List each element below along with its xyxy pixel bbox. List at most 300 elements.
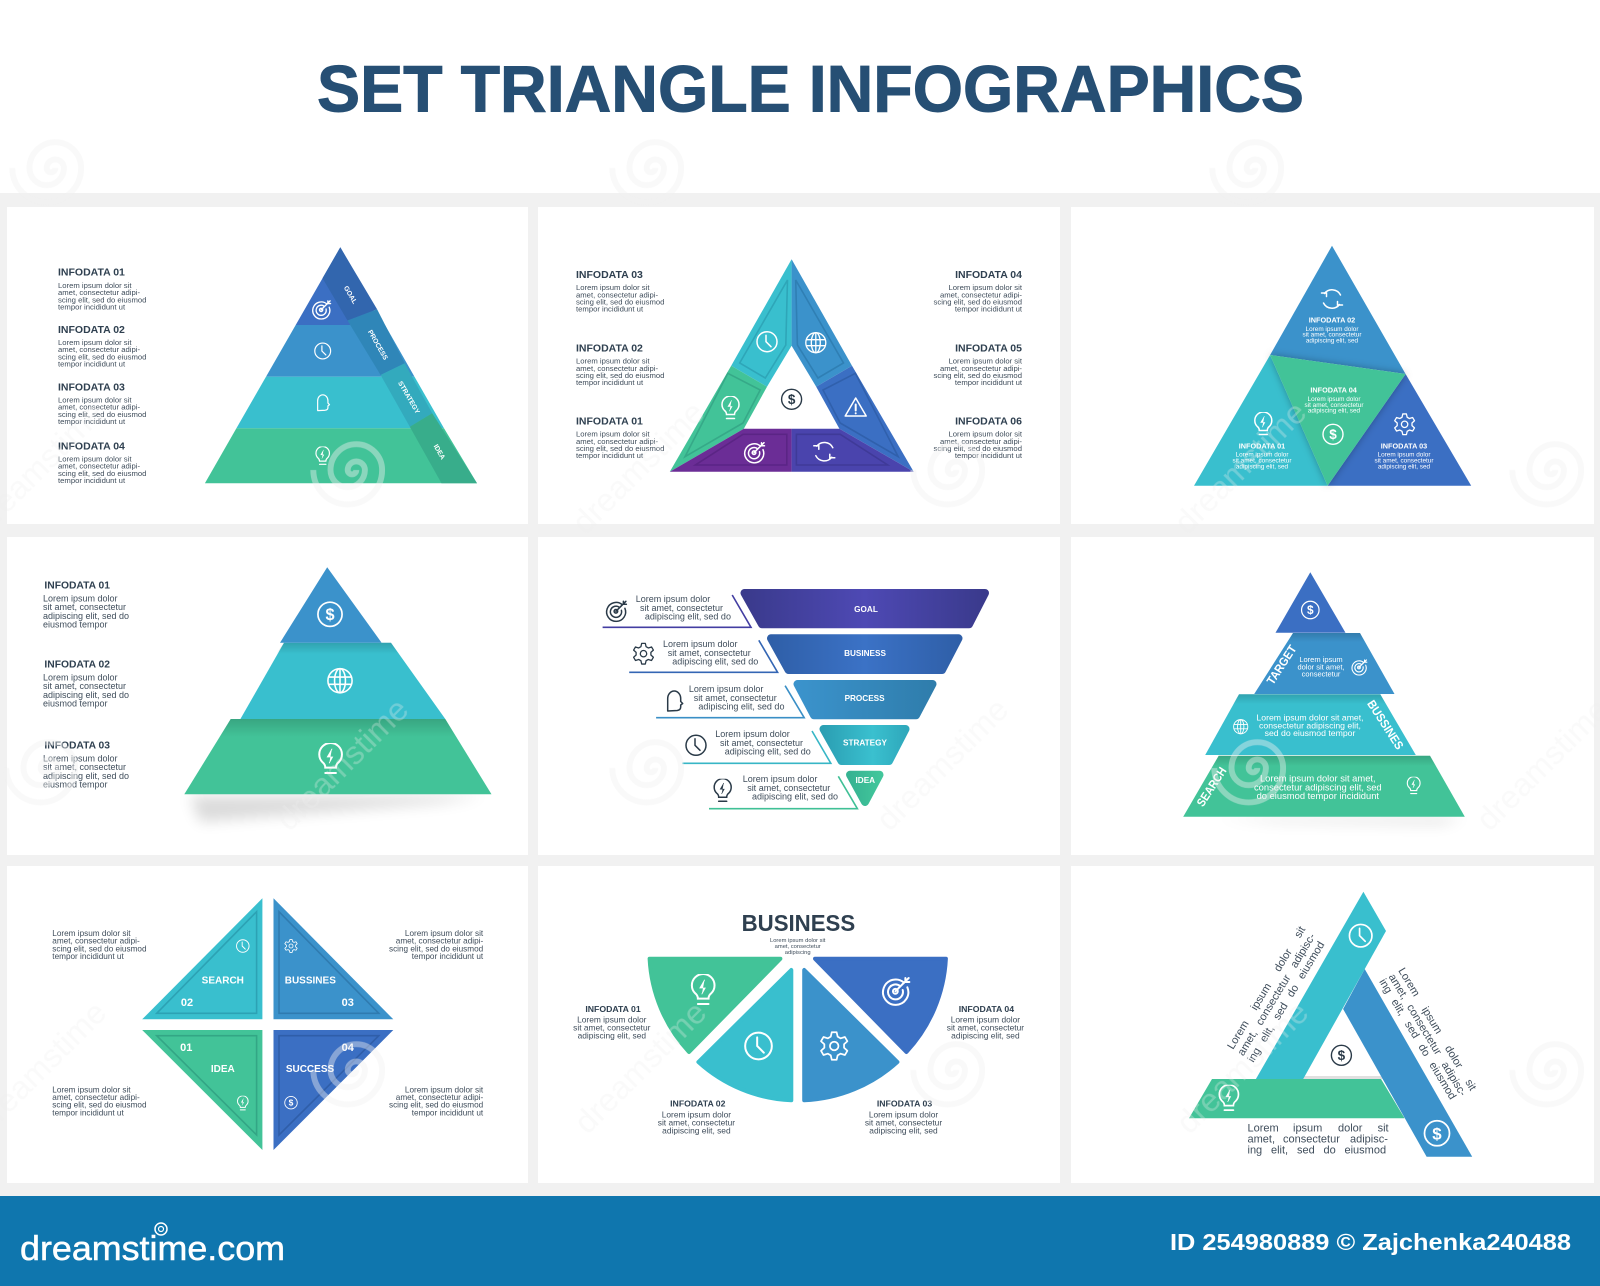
text block: infodata 01 <box>58 267 146 311</box>
text block: infodata 03: adipiscing elit, sed do <box>43 771 129 781</box>
text: infodata 01: INFODATA 01 <box>1239 441 1285 450</box>
text block: infodata 02: INFODATA 02 <box>670 1098 726 1108</box>
text: infodata 04: sit amet, consectetur <box>1305 402 1364 409</box>
triangle: right royal <box>1328 374 1471 486</box>
text: infodata 04: adipiscing elit, sed <box>1308 408 1361 415</box>
text block: infodata 04 <box>947 1004 1024 1041</box>
text block: infodata 01 <box>573 1004 651 1041</box>
wedge: blue <box>804 970 897 1100</box>
panel: business semicircle <box>538 866 1060 1183</box>
footer bar <box>0 1196 1600 1286</box>
text: left rotated: ipsum <box>1249 981 1274 1013</box>
text: right rotated: eiusmod <box>1426 1060 1458 1102</box>
text block: infodata 02: Lorem ipsum dolor sit <box>58 338 132 347</box>
label: IDEA: IDEA <box>211 1064 235 1075</box>
text block: infodata 02: tempor incididunt ut <box>58 359 126 368</box>
text: infodata 03: Lorem ipsum dolor <box>1378 452 1431 459</box>
ground shadow <box>1215 818 1465 824</box>
text: bottom right: Lorem ipsum dolor sit <box>405 1085 484 1094</box>
segment: teal <box>731 259 792 387</box>
text block: infodata 01: scing elit, sed do eiusmod <box>58 295 146 304</box>
text block: infodata 02: eiusmod tempor <box>43 699 108 709</box>
funnel: process <box>798 684 932 715</box>
text: bottom: adipisc- <box>1350 1134 1388 1146</box>
text: infodata 03: adipiscing elit, sed <box>1378 463 1431 470</box>
text block: infodata 03: eiusmod tempor <box>43 780 108 790</box>
text: right rotated: ipsum <box>1419 1005 1444 1036</box>
text block: infodata 04: tempor incididunt ut <box>58 476 126 485</box>
text block: infodata 03: sit amet, consectetur <box>43 762 126 772</box>
label: SEARCH: SEARCH <box>202 976 244 987</box>
text block: infodata 03: Lorem ipsum dolor sit <box>576 283 650 292</box>
leader: strategy <box>682 731 831 763</box>
text block: infodata 02 <box>576 343 664 387</box>
icon: head <box>318 395 330 411</box>
text block: infodata 04: INFODATA 04 <box>58 441 125 453</box>
text block: infodata 01: Lorem ipsum dolor sit <box>576 430 650 439</box>
text block: infodata 02 <box>658 1098 735 1136</box>
text: infodata 02: adipiscing elit, sed <box>1306 337 1359 344</box>
text: bottom left: tempor incididunt ut <box>52 1108 124 1117</box>
band: green <box>1189 1079 1405 1118</box>
text block: infodata 03: tempor incididunt ut <box>576 304 644 314</box>
text: goal: adipiscing elit, sed do <box>645 612 731 622</box>
ground shadow <box>190 796 485 822</box>
icon: target <box>883 978 909 1005</box>
leader: idea <box>709 776 857 809</box>
text block: infodata 03: INFODATA 03 <box>576 269 643 281</box>
text: right rotated: consectetur <box>1404 1002 1444 1058</box>
text block: infodata 04: tempor incididunt ut <box>955 304 1023 314</box>
text: bottom left: scing elit, sed do eiusmod <box>52 1101 147 1110</box>
icon: globe <box>328 669 352 693</box>
side band: strategy <box>381 363 432 427</box>
text: top left: scing elit, sed do eiusmod <box>52 944 147 953</box>
text block: infodata 02 <box>43 660 129 709</box>
text: infodata 04 <box>1305 386 1364 415</box>
icon: clock <box>237 940 249 952</box>
text: idea: Lorem ipsum dolor <box>743 774 817 784</box>
side band: idea <box>410 413 477 483</box>
funnel: idea <box>850 775 880 802</box>
icon: dollar <box>318 602 342 626</box>
icon: bulb <box>1219 1085 1238 1110</box>
wedge: royal <box>815 959 946 1052</box>
text block: infodata 03: amet, consectetur adipi- <box>58 403 140 412</box>
text: dreamstime <box>565 394 711 540</box>
text: business: adipiscing elit, sed do <box>672 656 758 666</box>
text: right rotated: sit <box>1462 1077 1478 1093</box>
icon: center dollar <box>1331 1045 1351 1065</box>
text block: infodata 02: adipiscing elit, sed <box>662 1126 731 1136</box>
icon: warning <box>845 398 866 416</box>
text: dreamstime <box>1167 394 1313 540</box>
text block: infodata 01: adipiscing elit, sed <box>578 1031 646 1041</box>
icon: refresh <box>814 442 835 461</box>
funnel: goal <box>744 593 985 624</box>
panel: six segment triangle frame <box>538 207 1060 524</box>
text: target: consectetur <box>1302 670 1341 678</box>
text: infodata 03 <box>1375 441 1434 470</box>
label: BUSSINES: BUSSINES <box>285 976 336 987</box>
text: strategy: Lorem ipsum dolor <box>715 729 790 739</box>
text: bottom: do <box>1324 1144 1336 1156</box>
text block: infodata 01: sit amet, consectetur <box>43 602 126 612</box>
icon: bulb <box>319 743 342 773</box>
icon: dollar <box>1424 1121 1450 1146</box>
text block: infodata 03: INFODATA 03 <box>58 382 125 394</box>
text: bottom: sit <box>1378 1122 1389 1134</box>
text block: infodata 02: scing elit, sed do eiusmod <box>576 371 664 380</box>
text: search: Lorem ipsum dolor sit amet, <box>1260 772 1376 784</box>
funnel: process: PROCESS <box>845 694 885 703</box>
text block: infodata 02: INFODATA 02 <box>576 343 643 355</box>
icon: bulb <box>1407 777 1420 794</box>
text block: infodata 01: amet, consectetur adipi- <box>576 437 658 446</box>
text block: infodata 01: tempor incididunt ut <box>576 451 644 460</box>
icon: target <box>1352 660 1367 675</box>
text: target: Lorem ipsum <box>1299 655 1343 664</box>
text: left rotated: ing <box>1246 1046 1264 1065</box>
text: left rotated: amet, <box>1236 1028 1260 1058</box>
icon: globe <box>806 333 826 353</box>
text: right rotated: Lorem <box>1395 966 1422 999</box>
text: bottom: sed <box>1297 1144 1315 1156</box>
wedge: green <box>650 959 780 1052</box>
icon: dollar <box>1323 424 1343 444</box>
label: 02: 02 <box>181 997 193 1009</box>
icon: clock <box>1349 924 1372 947</box>
label: PROCESS: PROCESS <box>366 329 389 362</box>
panel: interlocked triangle <box>1071 866 1594 1183</box>
text block: infodata 01: sit amet, consectetur <box>573 1023 651 1033</box>
text block: infodata 03: Lorem ipsum dolor <box>43 754 118 764</box>
label: SEARCH: SEARCH <box>1194 765 1229 809</box>
text block: infodata 04: scing elit, sed do eiusmod <box>934 297 1022 306</box>
text block: infodata 02: amet, consectetur adipi- <box>576 364 658 373</box>
text block: infodata 01 <box>43 581 129 630</box>
text block: infodata 05: INFODATA 05 <box>955 343 1022 355</box>
text: infodata 02 <box>1303 316 1362 344</box>
text: goal: sit amet, consectetur <box>640 603 723 613</box>
footer logo: dreamstime.com <box>20 1230 285 1268</box>
text: right rotated: adipisc- <box>1439 1060 1469 1099</box>
text block: infodata 04 <box>58 441 146 485</box>
tier: blue <box>280 567 382 643</box>
text: left rotated: eiusmod <box>1296 940 1327 981</box>
quadrant: idea <box>142 1030 262 1150</box>
text block: infodata 03: Lorem ipsum dolor sit <box>58 396 132 405</box>
text block: infodata 04: adipiscing elit, sed <box>951 1031 1020 1041</box>
segment: royal <box>816 366 914 472</box>
text block: infodata 05: amet, consectetur adipi- <box>940 364 1022 373</box>
text: top left: tempor incididunt ut <box>52 952 124 961</box>
tier: blue <box>1254 633 1394 694</box>
text block: infodata 03: scing elit, sed do eiusmod <box>58 410 146 419</box>
text block: infodata 02: adipiscing elit, sed do <box>43 690 129 700</box>
text: left rotated: consectetur <box>1254 972 1294 1028</box>
text: top left: Lorem ipsum dolor sit <box>52 929 131 938</box>
icon: gear <box>1395 414 1414 435</box>
text: infodata 02: INFODATA 02 <box>1309 316 1355 325</box>
text: right rotated: do <box>1416 1042 1432 1059</box>
text block: infodata 03: INFODATA 03 <box>877 1098 932 1108</box>
icon: bulb <box>722 396 739 418</box>
label: IDEA: IDEA <box>432 443 446 461</box>
text block: infodata 03 <box>43 741 129 790</box>
funnel: idea: IDEA <box>856 776 875 785</box>
pyramid slice: strategy <box>236 377 444 428</box>
text: top right: amet, consectetur adipi- <box>396 937 483 946</box>
text: dreamstime <box>869 691 1015 837</box>
segment: indigo <box>792 429 914 472</box>
funnel: goal: GOAL <box>854 605 878 614</box>
segment: green <box>670 366 767 472</box>
text block: infodata 02: sit amet, consectetur <box>43 681 126 691</box>
panel: layered pyramid with side band <box>7 207 528 524</box>
text: infodata 01: adipiscing elit, sed <box>1236 463 1289 470</box>
text block: infodata 02: INFODATA 02 <box>44 660 110 671</box>
text block: infodata 02 <box>58 324 146 368</box>
panel: four quadrant diamond <box>7 866 528 1183</box>
label: 03: 03 <box>342 997 354 1009</box>
icon: bulb <box>714 779 731 801</box>
text block: infodata 05 <box>934 343 1023 387</box>
text: bottom right: tempor incididunt ut <box>412 1108 484 1117</box>
text: bottom right: scing elit, sed do eiusmod <box>389 1101 484 1110</box>
text: goal: Lorem ipsum dolor <box>636 594 710 604</box>
text block: infodata 06: Lorem ipsum dolor sit <box>948 430 1023 439</box>
text block: infodata 01: tempor incididunt ut <box>58 302 126 311</box>
icon: center dollar <box>782 389 802 409</box>
segment: purple <box>670 429 792 472</box>
quadrant: bussines <box>274 898 393 1019</box>
text block: infodata 04: Lorem ipsum dolor sit <box>58 455 132 464</box>
icon: refresh <box>1322 290 1342 308</box>
text: infodata 04: INFODATA 04 <box>1310 386 1358 395</box>
text: infodata 03: INFODATA 03 <box>1381 441 1427 450</box>
text: heading caption: amet, consectetur <box>775 944 821 950</box>
text: left rotated: sed <box>1271 1001 1291 1022</box>
text: bottom: ipsum <box>1293 1122 1322 1134</box>
text block: infodata 03: INFODATA 03 <box>44 741 110 752</box>
text: process: adipiscing elit, sed do <box>698 702 784 712</box>
icon: clock <box>315 343 331 359</box>
text: bottom: ing <box>1248 1144 1262 1156</box>
text: strategy: adipiscing elit, sed do <box>725 746 811 756</box>
tier: teal <box>1205 694 1416 755</box>
text block: infodata 04: Lorem ipsum dolor <box>951 1015 1020 1025</box>
text: left rotated: sit <box>1292 925 1308 940</box>
text: process: Lorem ipsum dolor <box>689 684 763 694</box>
text: infodata 02: sit amet, consectetur <box>1303 332 1362 339</box>
text block: infodata 02: Lorem ipsum dolor sit <box>576 357 650 366</box>
panel: inverted funnel <box>538 537 1060 855</box>
text: search: do eiusmod tempor incididunt <box>1257 790 1379 801</box>
text: bussines: sed do eiusmod tempor <box>1265 728 1355 738</box>
text block: infodata 01: INFODATA 01 <box>576 416 643 428</box>
funnel: business: BUSINESS <box>844 649 886 658</box>
text block: infodata 05: scing elit, sed do eiusmod <box>934 371 1022 380</box>
side band: goal <box>322 247 377 320</box>
text: top right: scing elit, sed do eiusmod <box>389 944 484 953</box>
triangle: left teal <box>1194 355 1328 486</box>
text: right rotated: elit, <box>1389 997 1408 1018</box>
text block: infodata 04: INFODATA 04 <box>959 1004 1014 1014</box>
inner shadow <box>1301 1076 1383 1079</box>
funnel: strategy <box>824 729 906 761</box>
icon: gear <box>285 940 297 952</box>
text: bottom right: amet, consectetur adipi- <box>396 1093 483 1102</box>
icon: gear <box>634 643 653 664</box>
text block: infodata 01: scing elit, sed do eiusmod <box>576 444 664 453</box>
text block: infodata 01: Lorem ipsum dolor <box>577 1015 647 1025</box>
text: idea: adipiscing elit, sed do <box>752 792 838 802</box>
text block: infodata 03: sit amet, consectetur <box>865 1118 942 1128</box>
text: left rotated: Lorem <box>1225 1019 1252 1052</box>
text block: infodata 04: INFODATA 04 <box>955 269 1022 281</box>
text: bottom: eiusmod <box>1344 1144 1386 1156</box>
icon: clock <box>757 332 777 352</box>
text block: infodata 06: INFODATA 06 <box>955 416 1022 428</box>
text block: infodata 05: Lorem ipsum dolor sit <box>948 357 1023 366</box>
text: business: Lorem ipsum dolor <box>663 639 738 649</box>
text block: infodata 01: adipiscing elit, sed do <box>43 611 129 621</box>
text block: infodata 04 <box>934 269 1023 314</box>
icon: bulb <box>692 974 715 1004</box>
text block: infodata 02: amet, consectetur adipi- <box>58 345 140 354</box>
text: left rotated <box>1225 925 1327 1065</box>
icon: dollar <box>1302 601 1319 619</box>
label: 01: 01 <box>180 1042 192 1054</box>
text: infodata 01: sit amet, consectetur <box>1233 457 1292 464</box>
icon: target <box>745 443 764 463</box>
text block: infodata 04: amet, consectetur adipi- <box>940 290 1022 299</box>
text: target: dolor sit amet, <box>1297 662 1345 671</box>
text: left rotated: elit, <box>1258 1024 1277 1044</box>
text block: infodata 06: scing elit, sed do eiusmod <box>934 444 1022 453</box>
text block: infodata 06 <box>934 416 1023 460</box>
tier: green <box>184 719 492 794</box>
text: search: consectetur adipiscing elit, sed <box>1254 781 1382 792</box>
panel: four tier labelled pyramid <box>1071 537 1594 855</box>
funnel: strategy: STRATEGY <box>843 739 888 748</box>
text block: infodata 06: amet, consectetur adipi- <box>940 437 1022 446</box>
triangle: top blue <box>1270 246 1406 374</box>
text: infodata 01: Lorem ipsum dolor <box>1236 452 1289 459</box>
text: right rotated: ing <box>1376 977 1394 996</box>
text block: infodata 02: sit amet, consectetur <box>658 1118 735 1128</box>
icon: gear <box>821 1032 847 1060</box>
text: bussines: Lorem ipsum dolor sit amet, <box>1256 712 1364 722</box>
text block: infodata 03 <box>865 1098 942 1136</box>
text block: infodata 03: scing elit, sed do eiusmod <box>576 297 664 306</box>
tier: royal <box>1276 572 1346 633</box>
text: top left: amet, consectetur adipi- <box>52 937 140 946</box>
text block: infodata 02: Lorem ipsum dolor <box>43 672 118 682</box>
text: infodata 01 <box>1233 441 1292 470</box>
leader: process <box>656 686 804 718</box>
quadrant: search <box>142 898 262 1019</box>
segment: blue <box>792 259 852 387</box>
text block: infodata 04: amet, consectetur adipi- <box>58 462 140 471</box>
icon: target <box>607 601 626 621</box>
icon: dollar <box>285 1096 297 1109</box>
icon: clock <box>745 1033 772 1059</box>
icon: target <box>313 301 331 319</box>
triangle: center green <box>1270 355 1406 486</box>
text: top right: tempor incididunt ut <box>412 952 484 961</box>
side band: process <box>348 309 405 375</box>
text: bottom: elit, <box>1271 1144 1288 1156</box>
text: bottom: amet, <box>1248 1134 1275 1146</box>
text: dreamstime <box>567 994 713 1140</box>
text: idea: sit amet, consectetur <box>747 783 830 793</box>
text block: infodata 03 <box>576 269 664 314</box>
text block: infodata 06: tempor incididunt ut <box>955 451 1023 460</box>
text block: infodata 02: scing elit, sed do eiusmod <box>58 352 146 361</box>
text: dreamstime <box>1169 994 1315 1140</box>
text: heading caption: Lorem ipsum dolor sit <box>770 938 826 944</box>
text: top right: Lorem ipsum dolor sit <box>405 929 484 938</box>
leader: goal <box>603 595 751 627</box>
title: SET TRIANGLE INFOGRAPHICS <box>317 52 1304 126</box>
text block: infodata 03: tempor incididunt ut <box>58 417 126 426</box>
tier: teal <box>240 643 445 719</box>
text: right rotated: amet, <box>1386 972 1410 1002</box>
text block: infodata 04: Lorem ipsum dolor sit <box>948 283 1023 292</box>
text block: infodata 04: scing elit, sed do eiusmod <box>58 469 146 478</box>
text: heading caption: adipiscing <box>785 950 811 956</box>
text: bussines: consectetur adipiscing elit, <box>1259 720 1361 730</box>
panel: three tier pyramid <box>7 537 528 855</box>
footer credit: ID 254980889 © Zajchenka240488 <box>1170 1229 1571 1255</box>
icon: globe <box>1234 720 1248 734</box>
text block: infodata 01 <box>576 416 664 460</box>
text: left rotated: adipisc- <box>1288 931 1318 970</box>
text block: infodata 01: INFODATA 01 <box>44 581 110 592</box>
text block: infodata 03 <box>58 382 146 426</box>
text: bottom: Lorem <box>1248 1122 1279 1134</box>
label: BUSSINES: BUSSINES <box>1364 698 1406 752</box>
text block: infodata 01: Lorem ipsum dolor sit <box>58 281 132 290</box>
text: infodata 02: Lorem ipsum dolor <box>1306 326 1359 333</box>
text block: infodata 04: sit amet, consectetur <box>947 1023 1024 1033</box>
text block: infodata 03: Lorem ipsum dolor <box>869 1110 938 1120</box>
icon: clock <box>686 735 706 755</box>
text block: infodata 01: eiusmod tempor <box>43 620 108 630</box>
text: bottom: consectetur <box>1283 1134 1340 1146</box>
text: right rotated: dolor <box>1442 1043 1465 1071</box>
icon: bulb <box>316 446 329 464</box>
quadrant: success <box>274 1030 393 1150</box>
text: infodata 03: sit amet, consectetur <box>1375 457 1434 464</box>
text: left rotated: dolor <box>1272 947 1295 974</box>
text block: infodata 02: tempor incididunt ut <box>576 378 644 387</box>
text block: infodata 01: INFODATA 01 <box>58 267 125 279</box>
pyramid slice: idea <box>205 428 477 483</box>
text block: infodata 02: Lorem ipsum dolor <box>662 1110 731 1120</box>
text block: infodata 03: adipiscing elit, sed <box>869 1126 938 1136</box>
text: left rotated: do <box>1285 983 1301 999</box>
label: STRATEGY: STRATEGY <box>396 380 421 416</box>
text block: infodata 01: INFODATA 01 <box>585 1004 641 1014</box>
text: infodata 04: Lorem ipsum dolor <box>1308 396 1361 403</box>
label: TARGET: TARGET <box>1264 642 1300 687</box>
text block: infodata 01: amet, consectetur adipi- <box>58 288 140 297</box>
pyramid slice: process <box>266 325 414 377</box>
text: strategy: sit amet, consectetur <box>720 738 803 748</box>
